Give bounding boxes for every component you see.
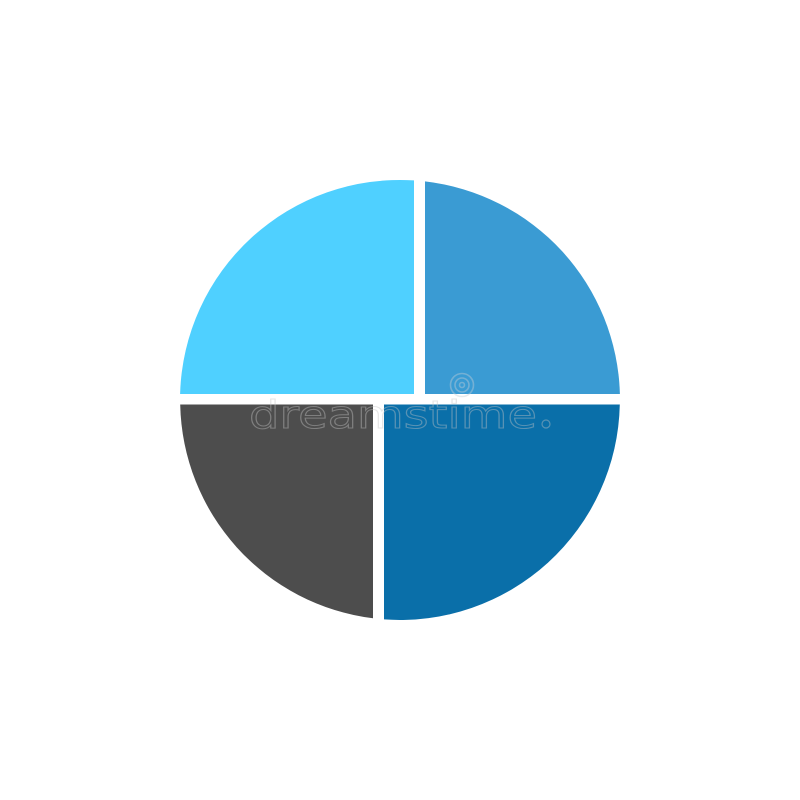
segment: top left, light blue: [180, 180, 414, 394]
segment: bottom left, dark gray: [180, 404, 373, 618]
watermark: [249, 374, 550, 437]
watermark wordmark: dreamstime: [249, 393, 537, 437]
segment: bottom right, dark blue: [384, 404, 620, 620]
watermark registered mark: [542, 420, 550, 428]
segment: top right, medium blue: [425, 181, 620, 394]
pie chart: [180, 180, 620, 620]
watermark spiral icon: [450, 374, 474, 396]
